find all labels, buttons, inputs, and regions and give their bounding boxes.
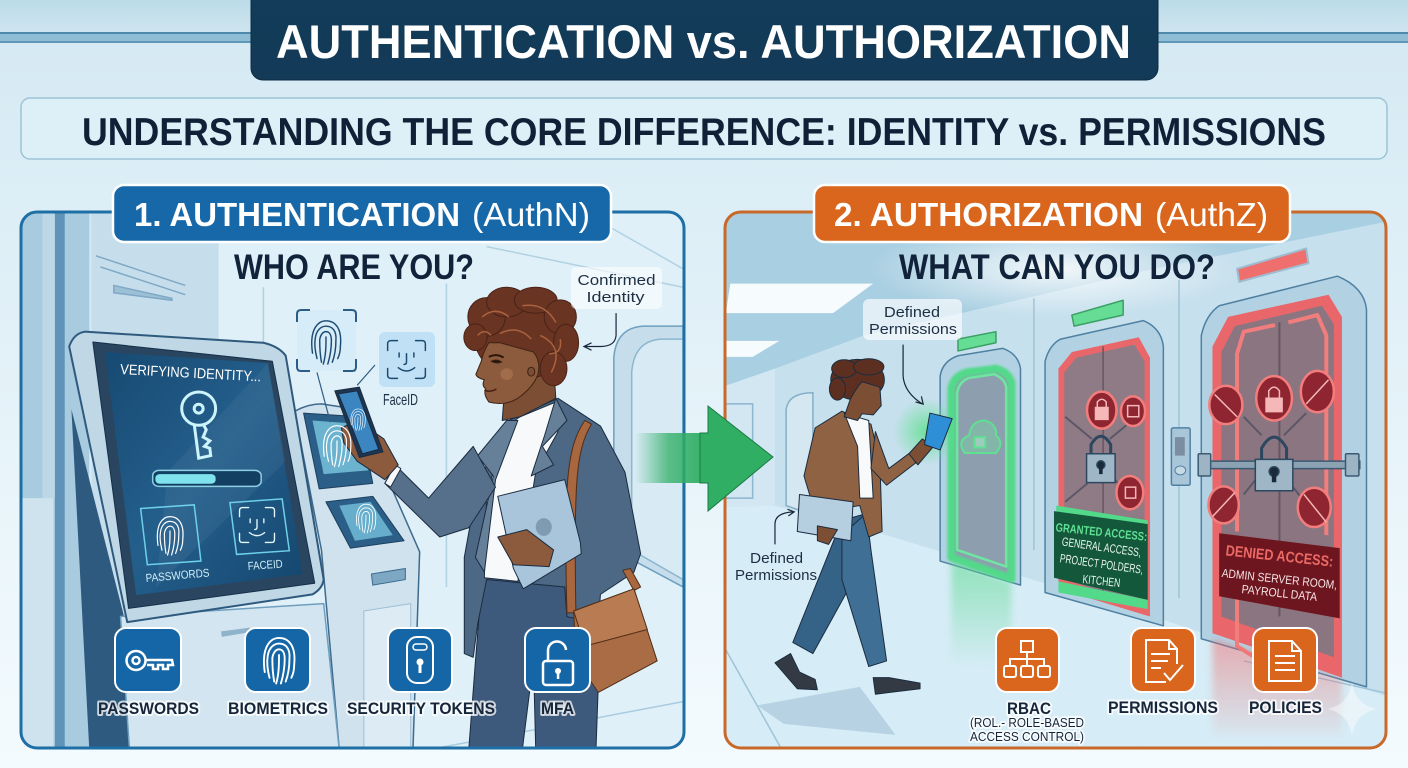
sign: denied access [1221, 542, 1338, 604]
sign: granted access: KITCHEN [1082, 572, 1121, 590]
sign: denied access: ADMIN SERVER ROOM, [1221, 566, 1338, 592]
callout: confirmed identity: Confirmed [578, 272, 656, 289]
tile labels [98, 699, 574, 718]
sign: denied access: PAYROLL DATA [1241, 582, 1318, 604]
door lock bar [1198, 454, 1360, 476]
rbac description [970, 715, 1084, 744]
green door [940, 332, 1021, 668]
icon: glowing key [182, 392, 216, 458]
tile: mfa open padlock [525, 628, 590, 692]
woman walking [775, 359, 960, 694]
subtitle banner: UNDERSTANDING THE CORE DIFFERENCE: IDENTITY vs. PERMISSIONS [82, 111, 1326, 154]
tile: security token [388, 628, 452, 692]
sign: granted access: PROJECT POLDERS, [1059, 551, 1144, 577]
corridor walls and floor [721, 210, 1391, 753]
woman: curly hair [464, 287, 579, 386]
arrow: authentication to authorization [635, 406, 773, 511]
callout: confirmed identity [571, 267, 662, 309]
callout arrows [775, 345, 923, 544]
icon: kiosk fingerprints [324, 409, 376, 533]
rbac description: ACCESS CONTROL) [970, 729, 1084, 744]
second door [1045, 300, 1163, 626]
circle glyphs [1096, 380, 1329, 522]
tile: biometrics fingerprint [245, 628, 310, 692]
woman: hair curls [478, 305, 561, 372]
woman: trousers and coat [464, 365, 641, 750]
red prohibition circles [1087, 371, 1334, 527]
verifying text: VERIFYING IDENTITY... [120, 362, 261, 385]
sign: granted access [1055, 520, 1148, 590]
pointer lines [317, 365, 375, 422]
panel border [725, 212, 1386, 748]
title banner [251, 0, 1158, 80]
screen labels: PASSWORDS [145, 567, 210, 585]
panel border [21, 212, 684, 748]
wall switch [1171, 428, 1190, 485]
tile labels: RBAC [1007, 699, 1051, 718]
header badge: authentication [113, 185, 611, 242]
tile labels: MFA [541, 699, 574, 718]
icon: floating face tile [379, 332, 435, 387]
callout: defined permissions upper: Permissions [869, 321, 957, 338]
screen labels [145, 559, 283, 585]
progress bar [153, 470, 261, 486]
icon: floating fingerprint tile [297, 310, 356, 371]
header badge: authorization: 2. AUTHORIZATION [834, 196, 1143, 233]
rbac description: (ROL.- ROLE-BASED [970, 715, 1084, 730]
icon: screen face [240, 508, 274, 542]
tile: permissions document [1131, 628, 1195, 692]
tile: passwords key [115, 628, 181, 692]
header badge: authentication: (AuthN) [472, 196, 590, 233]
icon: sparkle [1328, 682, 1376, 736]
icon: screen fingerprint [157, 517, 183, 555]
kiosk machine [69, 332, 420, 750]
callout: defined permissions upper: Defined [884, 304, 940, 321]
cloud lock icon [961, 420, 1000, 453]
woman: strap and bag [566, 420, 657, 692]
icon: screen boxes [141, 499, 289, 565]
sign: granted access: GENERAL ACCESS, [1061, 535, 1142, 560]
sign: granted access: GRANTED ACCESS: [1055, 520, 1148, 544]
heading: what can you do: WHAT CAN YOU DO? [899, 248, 1215, 287]
padlocks [1087, 436, 1293, 491]
woman: face [476, 343, 539, 404]
bottom tiles [115, 628, 590, 692]
header badge: authorization: (AuthZ) [1155, 196, 1268, 233]
tile: rbac org chart [996, 628, 1059, 692]
callout: confirmed identity: Identity [586, 289, 645, 306]
subtitle banner [21, 98, 1387, 159]
authorization scene [721, 210, 1391, 753]
tile: policies document [1253, 628, 1317, 692]
woman: arm, tablet and phone [335, 387, 581, 589]
bottom tiles [996, 628, 1317, 692]
callout: defined permissions lower [735, 550, 817, 584]
tile labels: POLICIES [1249, 698, 1322, 717]
icon: face brackets [388, 341, 425, 378]
header badge: authorization [814, 185, 1290, 242]
third door [1201, 248, 1366, 735]
tile labels: SECURITY TOKENS [347, 699, 495, 718]
heading: who are you: WHO ARE YOU? [234, 248, 474, 287]
screen labels: FACEID [247, 559, 283, 573]
callout: defined permissions lower: Permissions [735, 567, 817, 584]
callout arrow [584, 313, 616, 350]
panel: authentication [18, 185, 684, 753]
header badge: authentication: 1. AUTHENTICATION [134, 196, 460, 233]
authentication scene [18, 210, 683, 753]
tile labels [1007, 698, 1322, 718]
panel: authorization [721, 185, 1391, 753]
back wall and door panels [18, 210, 683, 753]
title banner: AUTHENTICATION vs. AUTHORIZATION [276, 15, 1131, 68]
tile labels: PERMISSIONS [1108, 698, 1218, 717]
callout: defined permissions upper [863, 299, 962, 340]
sign: denied access: DENIED ACCESS: [1225, 542, 1334, 571]
tile labels: PASSWORDS [98, 699, 199, 718]
callout: defined permissions lower: Defined [750, 550, 803, 567]
tile labels: BIOMETRICS [228, 699, 328, 718]
faceid label: FaceID [383, 392, 418, 409]
